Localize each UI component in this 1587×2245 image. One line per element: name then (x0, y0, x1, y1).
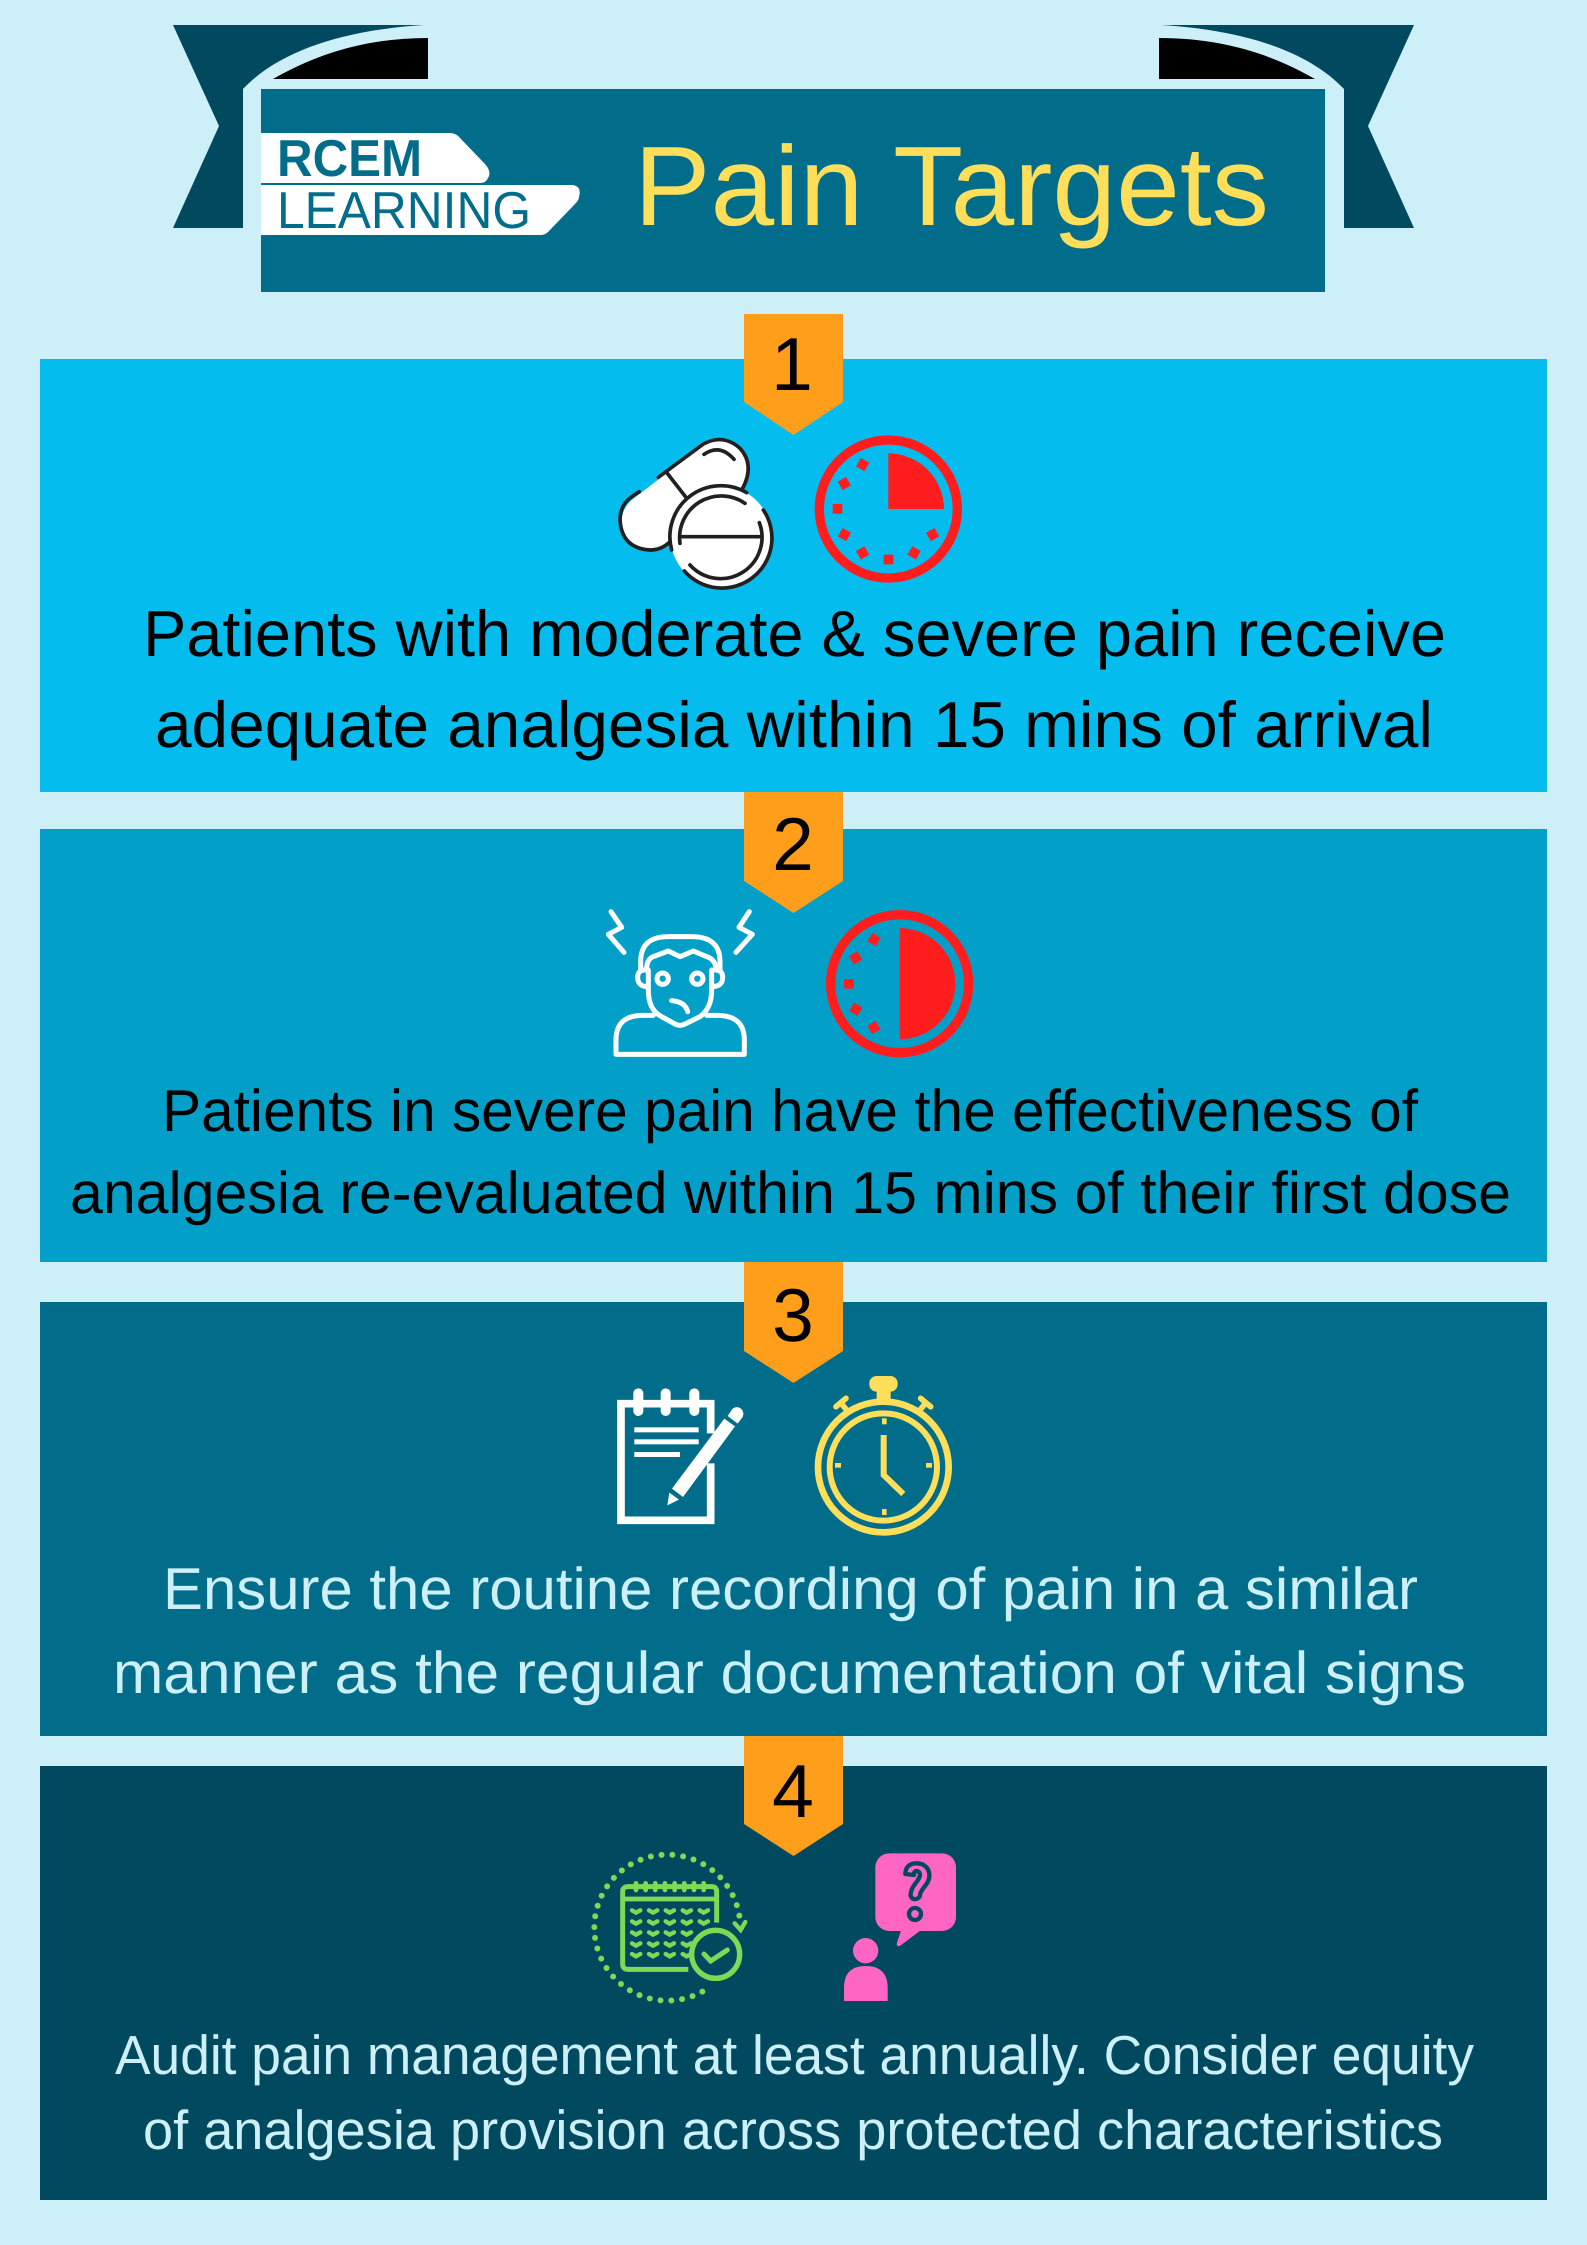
badge: number 1: 1 (771, 322, 813, 406)
text: target 3: Ensure the routine recording of pain in a similar (163, 1556, 1418, 1622)
text: target 3: manner as the regular documentation of vital signs (113, 1640, 1466, 1706)
text: target 2: analgesia re-evaluated within 15 mins of their first dose (70, 1160, 1511, 1226)
panel: target 3 (40, 1262, 1547, 1736)
panel: target 2 (40, 792, 1547, 1262)
text: target 4: Audit pain management at least annually. Consider equity (115, 2024, 1474, 2086)
panel: target 4 (40, 1736, 1547, 2200)
icon: person in pain (608, 912, 752, 1054)
logo: RCEM Learning: RCEM (277, 130, 422, 188)
ribbon: right fold (1159, 38, 1315, 79)
header banner (173, 25, 1414, 292)
text: target 2 (70, 1078, 1511, 1226)
icon: notepad and pencil (621, 1388, 743, 1520)
badge: number 4 (744, 1736, 843, 1856)
icon: person with question (844, 1853, 956, 2001)
badge: number 3: 3 (772, 1273, 814, 1357)
icon: pills (620, 440, 772, 588)
logo: RCEM Learning: LEARNING (277, 182, 531, 240)
icon: stopwatch (818, 1376, 949, 1532)
badge: number 2: 2 (772, 802, 814, 886)
badge: number 2 (744, 792, 843, 913)
badge: number 4: 4 (772, 1749, 814, 1833)
ribbon: left tail (173, 25, 424, 228)
icon: clock quarter (819, 440, 957, 578)
icon: annual calendar (594, 1855, 745, 2001)
ribbon: left fold (273, 38, 428, 79)
text: target 4: of analgesia provision across protected characteristics (143, 2099, 1443, 2161)
icon: clock half (831, 915, 969, 1053)
logo: RCEM Learning (261, 130, 580, 240)
badge: number 1 (744, 314, 843, 435)
ribbon: right tail (1161, 25, 1414, 228)
text: target 1: adequate analgesia within 15 mins of arrival (155, 688, 1433, 761)
banner panel (261, 89, 1325, 292)
text: target 3 (113, 1556, 1466, 1706)
text: target 1: Patients with moderate & severe pain receive (143, 597, 1446, 670)
text: target 4 (115, 2024, 1474, 2161)
badge: number 3 (744, 1262, 843, 1383)
text: target 1 (143, 597, 1446, 761)
text: target 2: Patients in severe pain have the effectiveness of (162, 1078, 1419, 1144)
title: Pain Targets (634, 123, 1269, 249)
panel: target 1 (40, 314, 1547, 792)
